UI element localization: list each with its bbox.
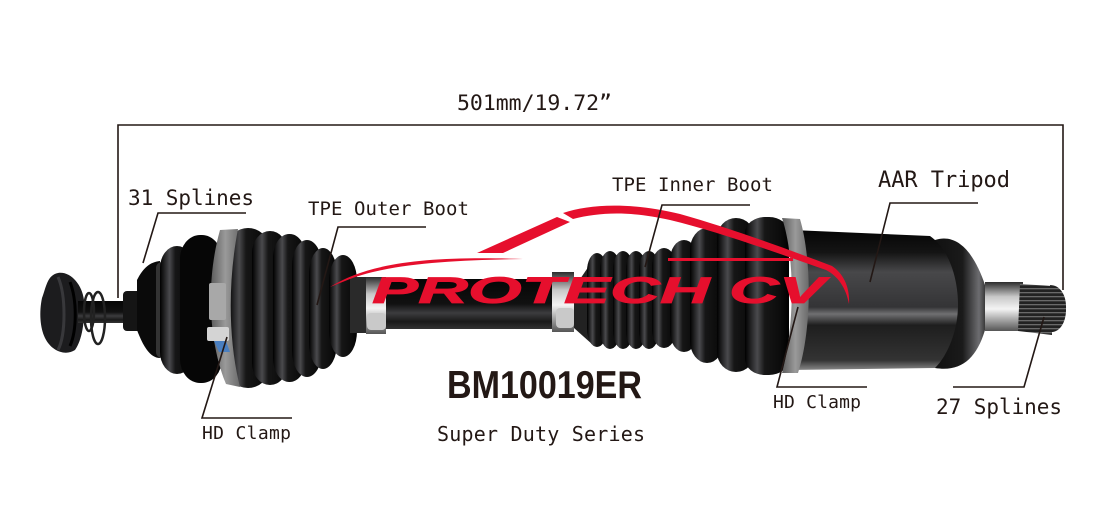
label: 31 Splines [128, 186, 254, 263]
label: right HD Clamp [773, 307, 867, 413]
label: AAR Tripod [870, 168, 1010, 282]
AAR tripod housing [792, 230, 958, 370]
label: TPE Outer Boot: TPE Outer Boot [308, 198, 469, 220]
overall length dimension bracket [118, 125, 1063, 298]
left end cap [40, 273, 84, 353]
small clamps [366, 272, 574, 334]
label: TPE Inner Boot: TPE Inner Boot [612, 174, 773, 196]
flange ring [935, 239, 985, 369]
logo text: PROTECH CV [372, 270, 831, 311]
shaft stub with spring [78, 291, 143, 344]
outer boot [156, 228, 368, 388]
label: left HD Clamp: HD Clamp [202, 423, 291, 444]
silver stem [985, 282, 1023, 331]
series name: Super Duty Series [437, 422, 645, 446]
label: 27 Splines [936, 317, 1062, 419]
label: left HD Clamp [202, 337, 292, 444]
swoosh [330, 206, 849, 304]
label: AAR Tripod: AAR Tripod [878, 168, 1010, 193]
inner boot [574, 217, 789, 375]
center bar shaft [383, 279, 553, 329]
label: right HD Clamp: HD Clamp [773, 392, 861, 413]
27 spline end [1018, 284, 1066, 335]
axle assembly photo [40, 217, 1066, 388]
spline disc [137, 261, 160, 358]
label: 27 Splines: 27 Splines [936, 395, 1062, 419]
outer HD clamp [207, 229, 240, 387]
part number: BM10019ER [447, 364, 642, 407]
brand logo [330, 206, 849, 311]
label: TPE Outer Boot [308, 198, 469, 305]
inner HD clamp [782, 218, 809, 373]
label: TPE Inner Boot [612, 174, 773, 267]
length label: 501mm/19.72” [457, 91, 612, 116]
label: 31 Splines: 31 Splines [128, 186, 254, 210]
